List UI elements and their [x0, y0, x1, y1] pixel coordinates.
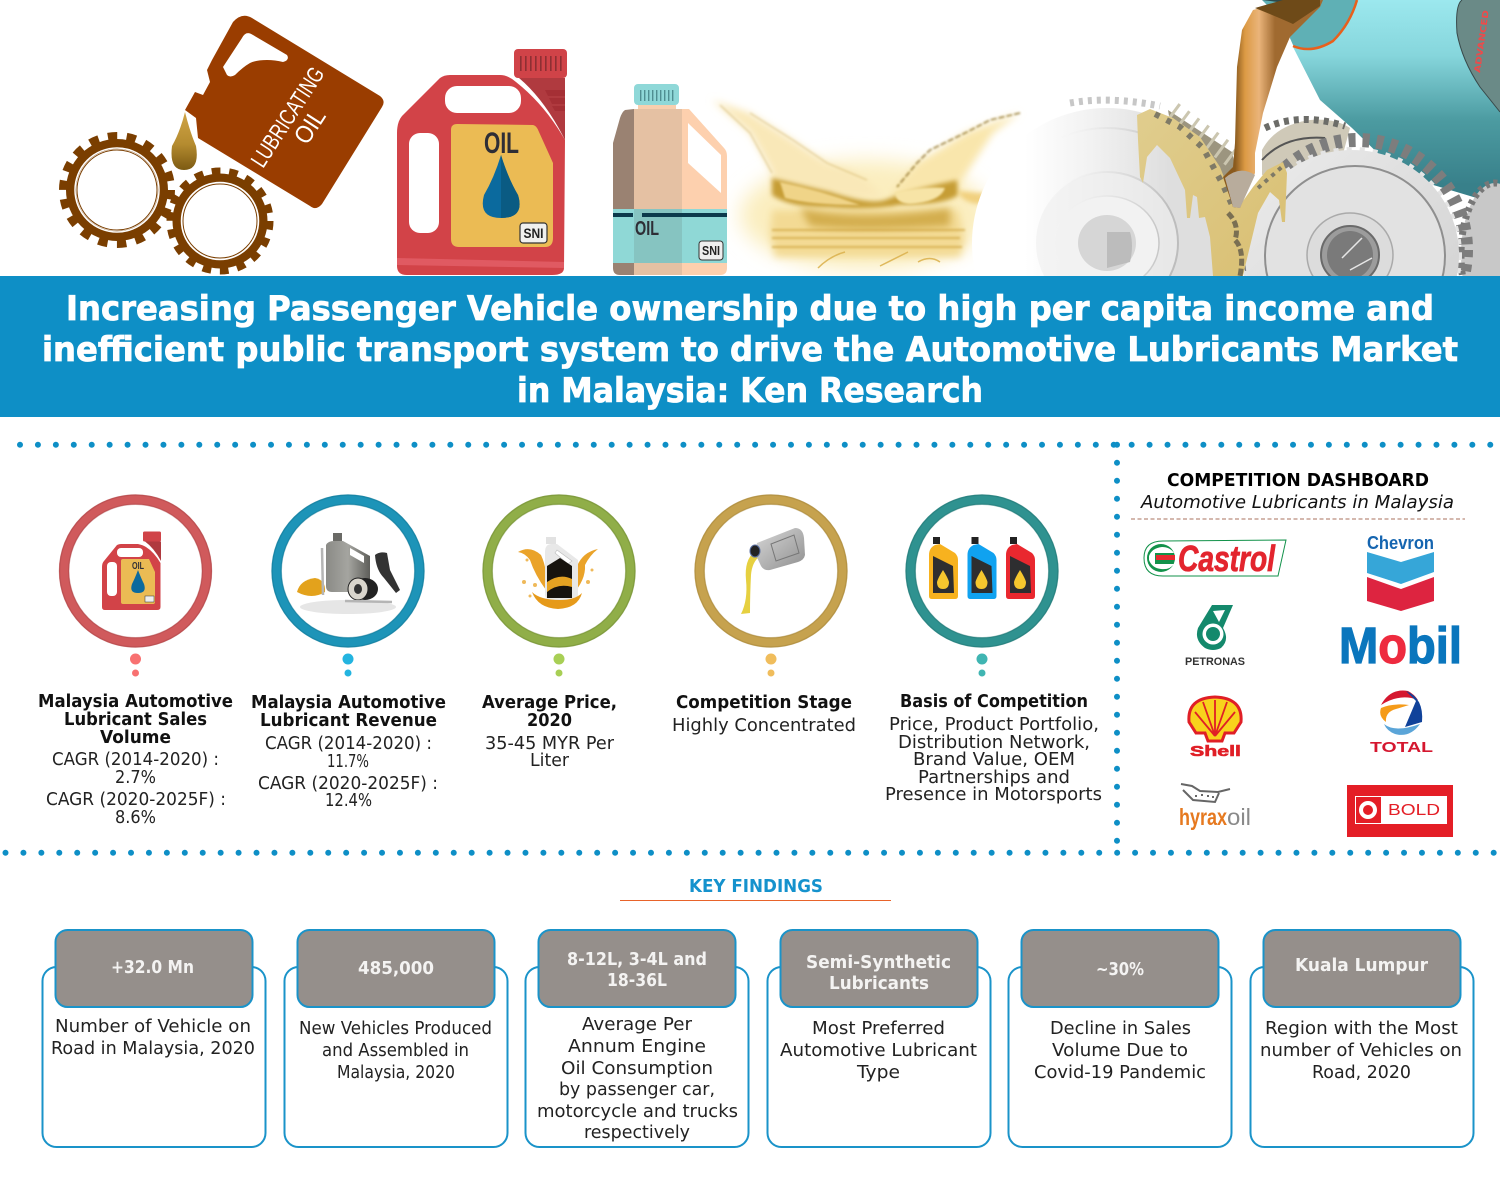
statistic: average price: 2020: [527, 711, 572, 731]
icon: peach oil bottle: [613, 84, 727, 275]
card: preferred lubricant type: Automotive Lubricant: [780, 1040, 977, 1061]
card: new vehicles produced: 485,000: [358, 958, 434, 979]
statistic: revenue: Lubricant Revenue: [260, 711, 437, 731]
icon: teal oil bottle: ADVANCED: [1473, 10, 1492, 73]
card: new vehicles produced: [284, 930, 508, 1147]
card: decline in sales: Covid-19 Pandemic: [1034, 1062, 1206, 1083]
card: decline in sales: ~30%: [1096, 959, 1144, 980]
panel: competition dashboard: Automotive Lubricants in Malaysia: [1140, 493, 1454, 513]
title banner: [0, 276, 1500, 417]
statistic: sales volume: [38, 495, 233, 828]
card: preferred lubricant type: Lubricants: [829, 973, 929, 994]
statistic: revenue: CAGR (2014-2020) :: [265, 734, 432, 754]
statistic: basis of competition: Partnerships and: [918, 768, 1070, 788]
connector dots: [554, 654, 564, 676]
card: engine oil consumption: Annum Engine: [568, 1036, 706, 1057]
statistic: basis of competition: Price, Product Portfolio,: [889, 715, 1099, 735]
icon: pouring oil can: [741, 528, 805, 614]
card: vehicles on road: Road in Malaysia, 2020: [51, 1038, 255, 1059]
card: decline in sales: Decline in Sales: [1050, 1018, 1191, 1039]
icon: motor oil bottle with splash: [518, 537, 598, 609]
icon: oil drop: [172, 112, 197, 170]
logo: Castrol: Castrol: [1178, 538, 1276, 579]
statistic: basis of competition: Brand Value, OEM: [913, 750, 1075, 770]
statistic: sales volume: 8.6%: [115, 808, 156, 828]
statistic: average price: Average Price,: [482, 693, 617, 713]
card: engine oil consumption: by passenger car,: [559, 1079, 715, 1100]
card: engine oil consumption: [526, 930, 748, 1147]
hero illustration band: [65, 0, 1500, 378]
statistic: sales volume: CAGR (2014-2020) :: [52, 750, 219, 770]
card: leading region: [1250, 930, 1474, 1147]
statistic: average price: [482, 495, 635, 771]
card: vehicles on road: +32.0 Mn: [111, 957, 194, 978]
logo: hyrax oil: hyrax: [1179, 804, 1227, 830]
logo: BOLD: [1347, 785, 1453, 837]
logo: Castrol: [1144, 538, 1286, 579]
logo: hyrax oil: oil: [1227, 804, 1251, 830]
icon: brown gears: [65, 138, 268, 269]
card: preferred lubricant type: Semi-Synthetic: [806, 952, 951, 973]
icon: red oil bottle: SNI: [524, 225, 544, 241]
connector dots: [766, 654, 776, 676]
statistic: basis of competition: [885, 495, 1102, 805]
statistic: average price: 35-45 MYR Per: [485, 734, 615, 754]
panel: competition dashboard: [1131, 471, 1465, 837]
statistic: competition stage: [672, 495, 856, 736]
statistic: revenue: Malaysia Automotive: [251, 693, 446, 713]
statistic: average price: Liter: [530, 751, 570, 771]
statistic: competition stage: Competition Stage: [676, 693, 852, 713]
logo: BOLD: BOLD: [1388, 802, 1440, 819]
icon: brown lubricating oil jug: LUBRICATING: [245, 62, 329, 172]
connector dots: [342, 654, 354, 676]
icon: brown lubricating oil jug: [185, 16, 384, 208]
card: new vehicles produced: New Vehicles Produced: [299, 1018, 492, 1039]
card: decline in sales: Volume Due to: [1052, 1040, 1188, 1061]
icon: red oil bottle: OIL: [484, 127, 519, 160]
oil splash: [712, 100, 1020, 270]
title banner: Increasing Passenger Vehicle ownership due to high per capita income and: [66, 289, 1434, 329]
logo: Shell: Shell: [1190, 743, 1241, 760]
card: new vehicles produced: and Assembled in: [322, 1040, 469, 1061]
statistic: revenue: CAGR (2020-2025F) :: [258, 774, 438, 794]
logo: Total: TOTAL: [1370, 739, 1433, 756]
card: leading region: Kuala Lumpur: [1295, 955, 1428, 976]
card: engine oil consumption: respectively: [584, 1122, 690, 1143]
card: preferred lubricant type: [768, 930, 990, 1147]
card: leading region: Road, 2020: [1312, 1062, 1411, 1083]
card: leading region: Region with the Most: [1265, 1018, 1458, 1039]
metal gears with pouring oil: [972, 100, 1500, 378]
logo: Petronas: [1185, 605, 1245, 668]
panel: competition dashboard: COMPETITION DASHBOARD: [1167, 471, 1429, 491]
icon: oil change kit: [297, 533, 400, 614]
card: engine oil consumption: Average Per: [582, 1014, 693, 1035]
icon: peach oil bottle: SNI: [702, 243, 720, 258]
card: engine oil consumption: Oil Consumption: [561, 1058, 713, 1079]
title banner: in Malaysia: Ken Research: [517, 371, 983, 411]
statistic: sales volume: CAGR (2020-2025F) :: [46, 790, 226, 810]
connector dots: [976, 654, 988, 676]
card: leading region: number of Vehicles on: [1260, 1040, 1462, 1061]
card: new vehicles produced: Malaysia, 2020: [337, 1062, 455, 1083]
logo: Mobil: Mobil: [1339, 617, 1462, 674]
panel: market statistics: [38, 495, 1102, 828]
icon: teal oil bottle: [1262, 0, 1500, 205]
icon: three oil bottles: [929, 537, 1035, 599]
card: preferred lubricant type: Type: [856, 1062, 900, 1083]
icon: red oil bottle: [397, 49, 567, 275]
statistic: sales volume: 2.7%: [115, 768, 156, 788]
logo: Chevron: [1367, 533, 1434, 611]
statistic: competition stage: Highly Concentrated: [672, 716, 856, 736]
statistic: basis of competition: Basis of Competition: [900, 692, 1088, 712]
statistic: basis of competition: Distribution Network,: [898, 733, 1090, 753]
card: engine oil consumption: 8-12L, 3-4L and: [567, 949, 707, 970]
card: engine oil consumption: 18-36L: [607, 970, 667, 991]
statistic: sales volume: Lubricant Sales: [64, 710, 207, 730]
logo: Shell: [1189, 697, 1241, 760]
logo: Total: [1370, 691, 1433, 756]
panel: key findings cards: [42, 930, 1474, 1147]
card: preferred lubricant type: Most Preferred: [812, 1018, 945, 1039]
card: decline in sales: [1008, 930, 1232, 1147]
icon: brown lubricating oil jug: OIL: [289, 104, 332, 149]
logo: Chevron: Chevron: [1367, 533, 1434, 553]
heading: key findings: KEY FINDINGS: [689, 877, 823, 897]
icon: red oil bottle: OIL: [132, 561, 144, 572]
card: engine oil consumption: motorcycle and trucks: [537, 1101, 738, 1122]
statistic: basis of competition: Presence in Motorsports: [885, 785, 1102, 805]
statistic: revenue: [251, 495, 446, 811]
statistic: revenue: 12.4%: [325, 791, 372, 811]
statistic: sales volume: Malaysia Automotive: [38, 692, 233, 712]
card: vehicles on road: [42, 930, 266, 1147]
logo: Petronas: PETRONAS: [1185, 656, 1245, 668]
gold oil on gears: [1137, 0, 1323, 276]
statistic: revenue: 11.7%: [327, 752, 369, 772]
icon: red oil bottle: [102, 532, 161, 610]
card: vehicles on road: Number of Vehicle on: [55, 1016, 251, 1037]
statistic: sales volume: Volume: [100, 728, 171, 748]
connector dots: [130, 654, 141, 676]
icon: peach oil bottle: OIL: [635, 218, 659, 240]
title banner: inefficient public transport system to drive the Automotive Lubricants Market: [42, 330, 1458, 370]
logo: hyrax oil: [1179, 784, 1251, 830]
